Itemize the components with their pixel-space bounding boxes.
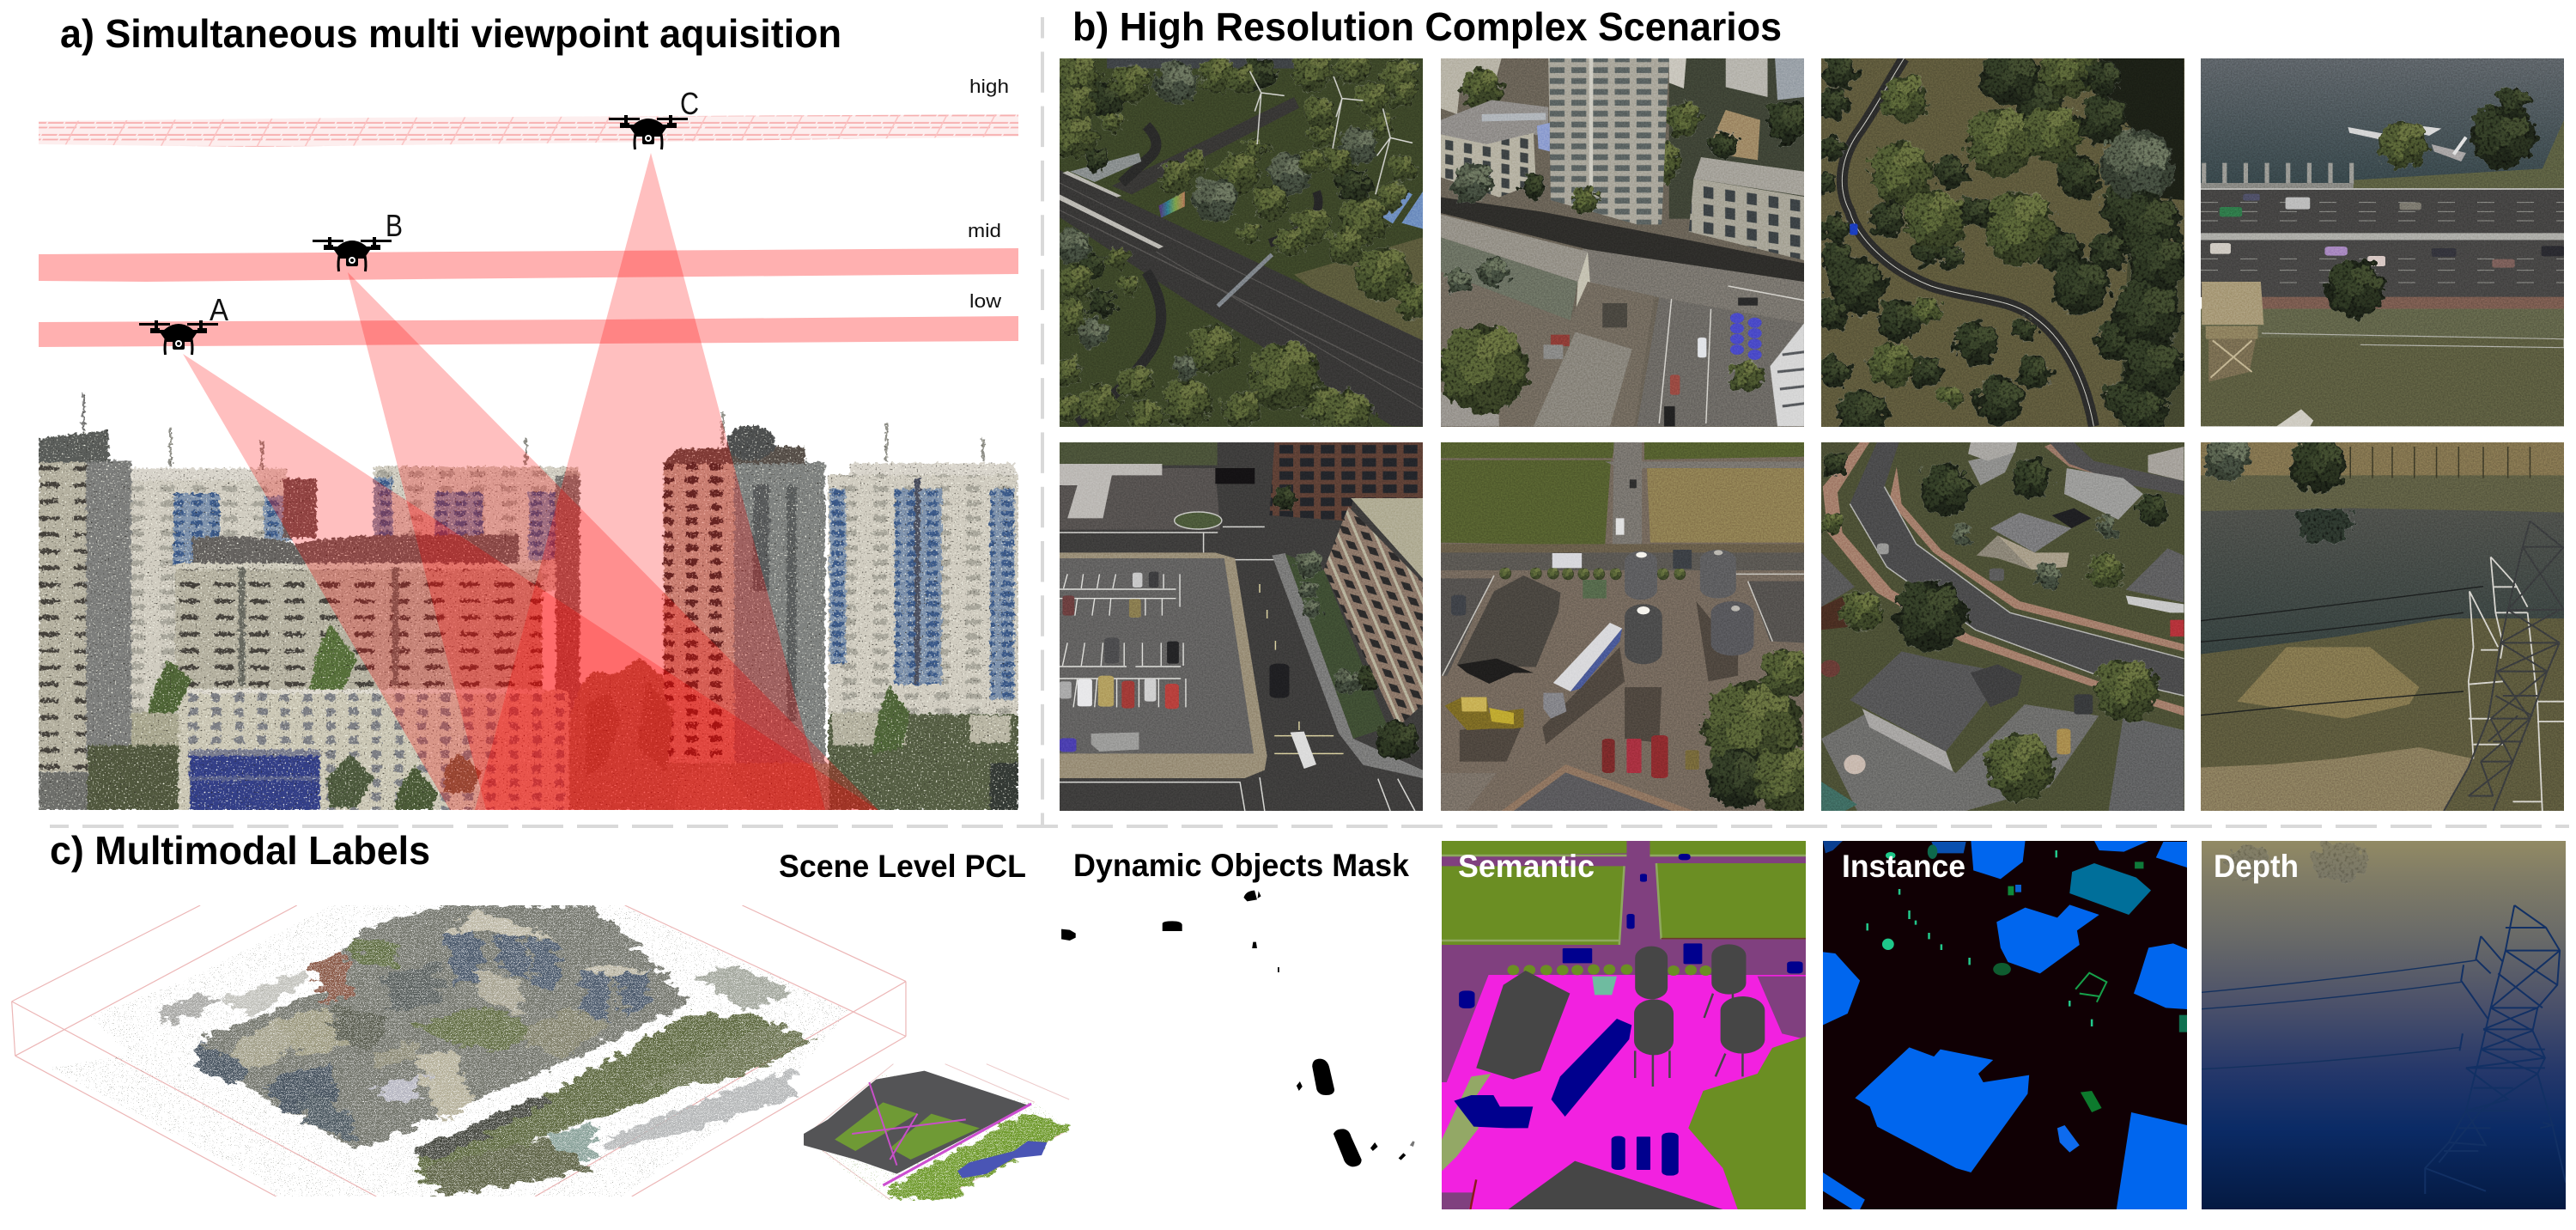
parking lines <box>1060 574 1186 707</box>
panel b: high resolution complex scenarios <box>1054 4 2566 816</box>
semantic scene point cloud <box>804 1063 1070 1201</box>
brick wall <box>2262 297 2564 309</box>
small bounding box <box>804 1064 1069 1200</box>
point cloud of buildings <box>39 393 1018 810</box>
hedge <box>1507 965 1711 976</box>
large house <box>1850 651 2022 771</box>
brick building <box>1270 442 1423 521</box>
scene: forest road <box>1821 58 2184 427</box>
dry patches <box>2237 647 2419 719</box>
green ground <box>890 1111 1069 1200</box>
roadside tree <box>2326 259 2385 319</box>
blue pond <box>957 1141 1047 1178</box>
pylons <box>2425 905 2566 1194</box>
foreground roof <box>1509 1161 1722 1209</box>
gantry <box>1218 254 1272 306</box>
tree canopy <box>1688 1037 1806 1209</box>
depth map <box>2202 841 2566 1209</box>
front building lower <box>179 689 569 810</box>
fields <box>1442 841 1806 945</box>
sidewalk strip <box>1060 552 1267 778</box>
far buildings <box>1441 58 1502 114</box>
flight band low <box>39 316 1018 347</box>
cars <box>1543 297 1758 426</box>
instance segmentation map <box>1823 841 2187 1209</box>
right office building <box>1693 157 1804 196</box>
motorway lower <box>2201 240 2564 297</box>
silo highlights <box>1636 550 1740 614</box>
billboard <box>1158 192 1185 218</box>
sparse outer points <box>48 905 849 1197</box>
parking lot <box>1060 558 1254 753</box>
label semantic: Semantic <box>1458 849 1595 884</box>
vehicles <box>2210 194 2564 268</box>
pool and patio <box>1820 660 1866 811</box>
plaza <box>1441 271 1655 426</box>
garden <box>1285 554 1388 739</box>
blue house instances <box>1823 841 2187 1209</box>
dark pylon <box>2444 521 2564 811</box>
winding road <box>1842 58 2093 426</box>
hedge row <box>1499 568 1686 580</box>
garden trees <box>1822 451 2169 801</box>
camera frustum from drone A <box>183 354 878 810</box>
bounding box wireframe <box>12 905 906 1197</box>
label B: B <box>386 208 403 243</box>
street trees <box>1440 163 1762 413</box>
green box <box>1583 580 1607 599</box>
middle house <box>1977 513 2072 569</box>
gas station canopy <box>1060 464 1162 518</box>
dynamic objects mask <box>1061 890 1415 1166</box>
cars <box>1877 544 2184 754</box>
dark water <box>2099 58 2184 200</box>
highway <box>1060 170 1423 426</box>
truck <box>1543 623 1622 719</box>
striped white tower <box>1770 323 1804 426</box>
left brick house <box>1821 552 1855 630</box>
silos <box>1625 550 1753 664</box>
panel c: multimodal labels <box>12 828 2566 1209</box>
cars and small objects <box>1868 844 2187 1153</box>
scene: dense city block <box>1441 58 2093 427</box>
pink sidewalks <box>1823 442 2184 715</box>
road markings <box>1060 527 1274 560</box>
heading dynamic objects mask: Dynamic Objects Mask <box>1073 848 1409 883</box>
solar panels <box>1381 186 1423 228</box>
yards <box>1821 704 2099 811</box>
road strip <box>883 1104 1031 1185</box>
warehouse roof <box>1534 332 1632 426</box>
roads <box>1442 841 1806 975</box>
front building upper <box>175 563 542 691</box>
top road <box>2050 442 2184 496</box>
RGB scene point cloud <box>11 905 907 1197</box>
dense buildings and vegetation <box>159 905 815 1197</box>
wind turbines <box>1250 71 1413 194</box>
wheat field <box>1647 468 1804 543</box>
billboard <box>1215 468 1255 484</box>
scene: farm with silos <box>1441 442 1804 811</box>
distant tree shading <box>2229 841 2365 882</box>
shadows <box>1460 601 1738 762</box>
heading c: c) Multimodal Labels <box>50 828 430 873</box>
trees <box>1054 52 1434 440</box>
roof dome <box>192 535 519 564</box>
green fields <box>1441 442 1804 545</box>
flight band high <box>39 114 1018 147</box>
waterside trees <box>2379 86 2536 170</box>
blue car <box>1850 223 1857 235</box>
roundabout <box>1175 512 1222 529</box>
lower corner trees <box>1377 720 1419 761</box>
far right building <box>829 463 1018 714</box>
road markings and bus <box>1260 584 1344 769</box>
right house <box>2126 548 2184 612</box>
back building centre <box>374 466 580 810</box>
magenta roads <box>852 1082 966 1166</box>
heading a: a) Simultaneous multi viewpoint aquisition <box>60 11 841 56</box>
blue umbrellas <box>1730 313 1762 360</box>
bottom right roof <box>2109 715 2184 811</box>
streets <box>1441 198 1804 286</box>
truck <box>1552 1019 1631 1117</box>
label A: A <box>210 292 228 327</box>
camera frustum from drone B <box>348 272 878 810</box>
light halo of points <box>804 1074 1069 1200</box>
secondary road <box>1112 97 1299 194</box>
heading b: b) High Resolution Complex Scenarios <box>1072 4 1782 49</box>
parked cars <box>1060 572 1179 752</box>
warehouse <box>1476 971 1570 1080</box>
farm roads <box>1613 442 1642 552</box>
vehicles <box>1454 854 1803 1176</box>
low building <box>1441 215 1588 282</box>
ground trees and low buildings <box>88 624 1018 810</box>
river <box>2201 508 2564 655</box>
warehouse <box>1457 575 1560 667</box>
white pylon <box>2469 557 2564 811</box>
label low: low <box>969 290 1001 312</box>
power lines <box>2202 960 2476 1069</box>
silos <box>1634 944 1765 1087</box>
label mid: mid <box>968 220 1001 241</box>
scene: parking lot <box>1060 297 2183 1198</box>
camera frustum from drone C <box>475 153 825 810</box>
label high: high <box>969 76 1009 97</box>
dashed divider: horizontal <box>50 825 2569 828</box>
icon: drone C <box>609 115 688 149</box>
scene: pylons over river <box>2201 442 2564 1017</box>
excavator <box>1445 697 1523 730</box>
power lines <box>2201 587 2483 715</box>
motorway upper <box>2201 189 2564 234</box>
flight band mid <box>39 248 1018 282</box>
dark buildings <box>804 1071 1028 1174</box>
building with solar roof <box>1441 100 1548 146</box>
green vegetation in streets <box>835 1102 980 1160</box>
scene: suburban houses <box>1821 442 2184 811</box>
teal box <box>1592 977 1617 995</box>
label instance: Instance <box>1842 849 1965 884</box>
back building left <box>131 468 317 746</box>
pillars <box>2201 163 2354 188</box>
large tree <box>1704 648 1822 816</box>
icon: drone B <box>313 237 392 271</box>
apartment block <box>1324 507 1423 728</box>
tunnel wall <box>1070 153 1141 182</box>
small pole <box>1470 1179 1476 1209</box>
teal house <box>2069 863 2151 915</box>
mask blobs <box>1061 891 1415 1166</box>
left tower <box>39 393 131 810</box>
terrain <box>1442 1074 1491 1171</box>
tree and reflection <box>2203 435 2353 544</box>
boats and seaplane <box>2348 125 2466 161</box>
label depth: Depth <box>2214 849 2299 884</box>
white house top <box>1968 442 2184 520</box>
grass <box>2201 309 2564 426</box>
forest trees <box>1811 39 2187 440</box>
icon: drone A <box>139 320 218 355</box>
heading scene level pcl: Scene Level PCL <box>779 849 1026 884</box>
scene: riverside motorway <box>2201 58 2564 426</box>
office tower <box>1548 58 1669 224</box>
central divider <box>2201 233 2564 240</box>
antennas <box>169 412 985 468</box>
small roof <box>2276 409 2313 426</box>
label C: C <box>680 86 699 121</box>
poplar row <box>2350 447 2530 478</box>
panel a: simultaneous multi viewpoint acquisition <box>39 11 1018 810</box>
blue box structure <box>190 750 320 810</box>
dashed divider: vertical <box>1041 17 1044 826</box>
watch tower <box>2202 282 2263 382</box>
noise texture over photo panels <box>1060 58 2566 811</box>
parked cars <box>1451 479 1699 778</box>
river bank <box>2353 120 2564 189</box>
semantic segmentation map <box>1442 841 1806 1209</box>
main curving road <box>1850 442 2184 696</box>
right tower <box>664 425 825 770</box>
far field <box>2201 442 2564 478</box>
low podium and plaza <box>131 713 179 748</box>
scene: highway with wind turbines <box>1060 58 1423 427</box>
right side pavement <box>1272 553 1423 778</box>
foreground roof <box>1502 764 1693 811</box>
service yard <box>1060 468 1220 530</box>
